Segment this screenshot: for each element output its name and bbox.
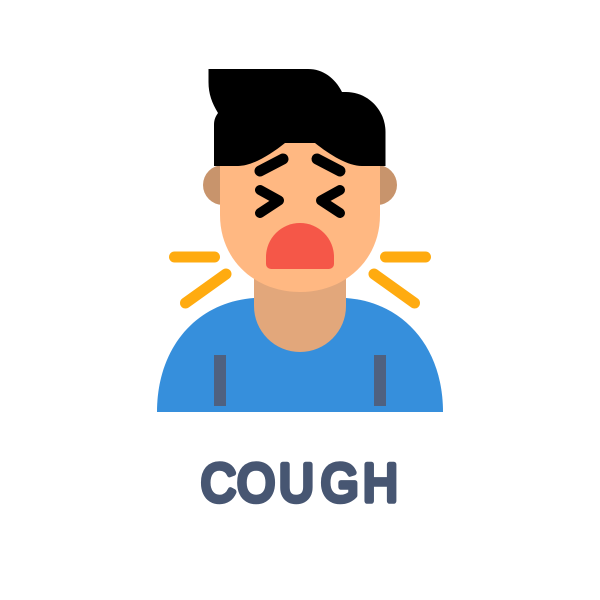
left hoodie strap xyxy=(214,355,226,406)
open mouth xyxy=(266,223,334,269)
left ear xyxy=(203,165,243,205)
face xyxy=(220,130,380,292)
right squinting eye xyxy=(321,190,340,213)
cough lines right xyxy=(374,257,426,303)
icon: person coughing xyxy=(157,69,443,412)
right eyebrow xyxy=(317,159,340,171)
hair xyxy=(208,69,386,166)
right hoodie strap xyxy=(374,355,386,406)
body: blue sweater xyxy=(157,298,443,412)
right ear xyxy=(357,165,397,205)
left eyebrow xyxy=(260,159,283,171)
title: COUGH xyxy=(201,453,398,513)
neck xyxy=(254,270,346,352)
cough lines left xyxy=(174,257,226,303)
left squinting eye xyxy=(260,190,279,213)
